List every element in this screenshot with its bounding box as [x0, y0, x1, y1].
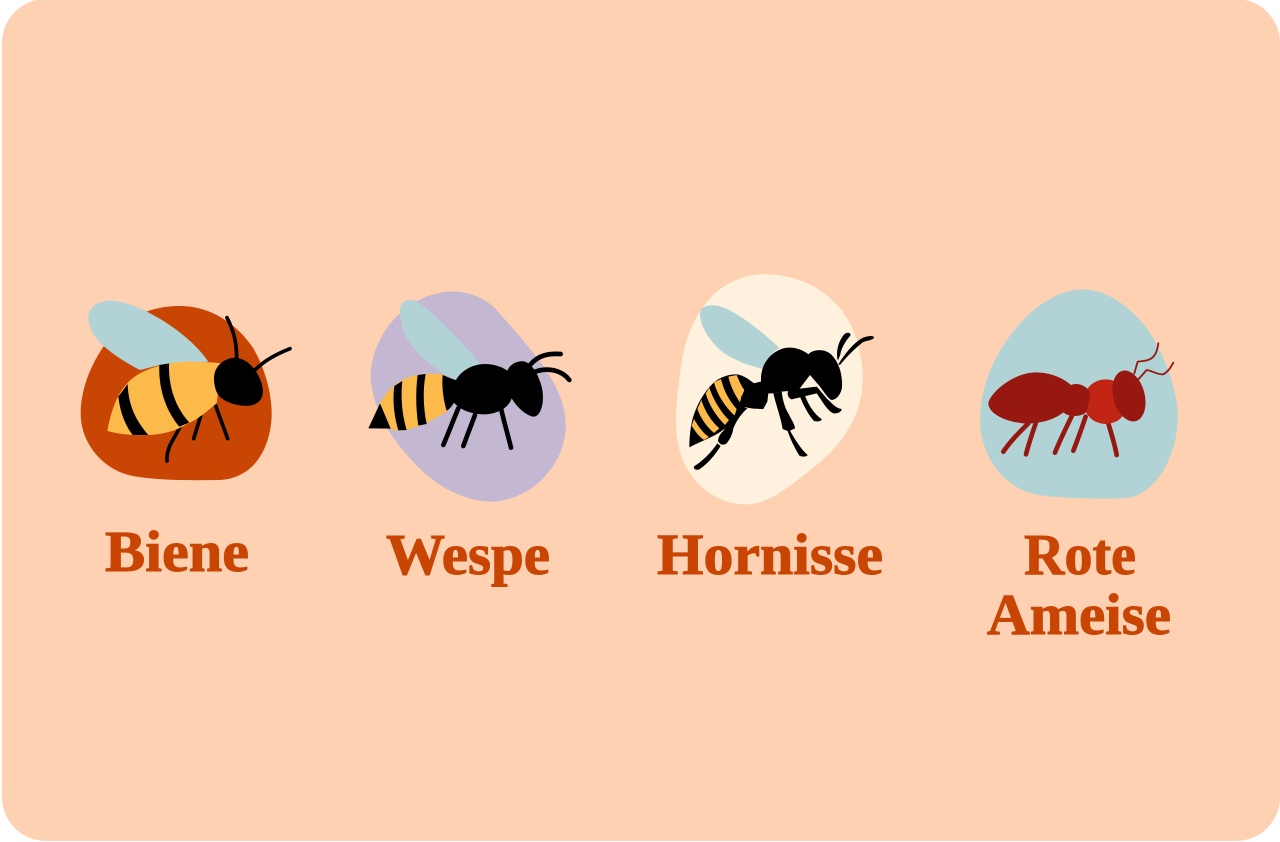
icon: wasp — [368, 300, 569, 448]
blob: Biene background — [81, 306, 272, 480]
label: Biene: Biene — [105, 519, 249, 584]
panel: Hornisse — [676, 274, 874, 504]
icon: bee — [88, 301, 290, 461]
icon: hornet — [689, 305, 874, 470]
icon: red ant — [988, 343, 1173, 455]
panel: Wespe — [368, 292, 569, 502]
blob: Hornisse background — [676, 274, 863, 504]
blob: Rote Ameise background — [980, 289, 1178, 499]
label: Rote Ameise — [987, 522, 1171, 647]
label: Hornisse: Hornisse — [657, 522, 883, 587]
label: Wespe: Wespe — [386, 522, 550, 587]
panel: Rote Ameise — [980, 289, 1178, 499]
label: Rote Ameise: Ameise — [987, 582, 1171, 647]
panel: Biene — [81, 301, 290, 480]
blob: Wespe background — [371, 292, 566, 502]
label: Rote Ameise: Rote — [1024, 522, 1136, 587]
